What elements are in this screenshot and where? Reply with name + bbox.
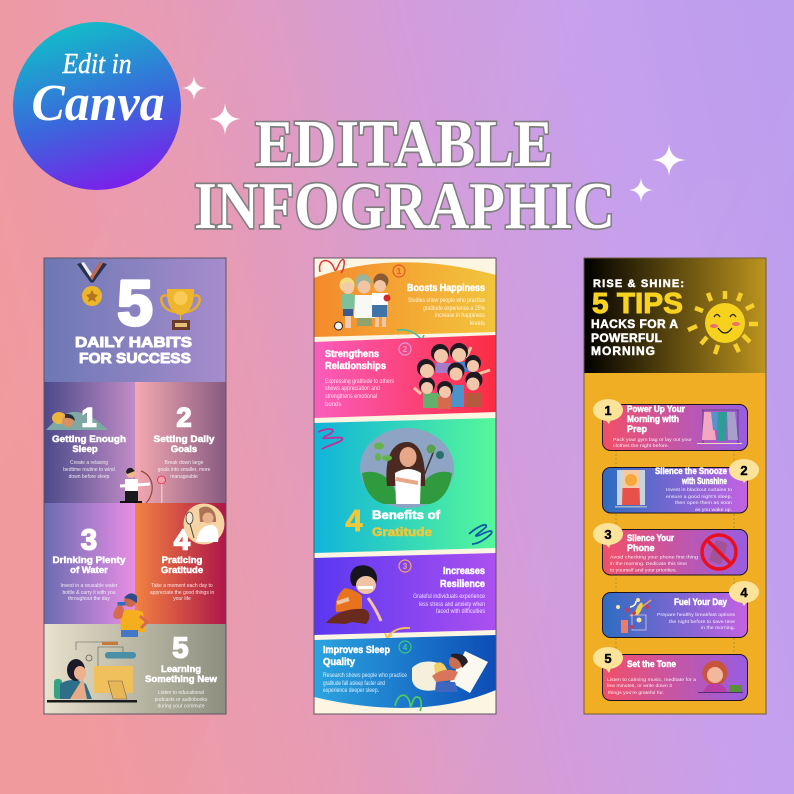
habit 3: of Water [70,565,108,576]
text: strengthens relationships: shows appreciation and [325,386,380,392]
heading: 4 benefits of gratitude: Gratitude [372,525,432,539]
number bubble 5 [593,647,623,673]
card 1: Prep [627,424,648,434]
text: increases resilience: Resilience [440,579,485,590]
badge: Edit in Canva: Edit in [62,48,132,80]
section: improves sleep quality [314,635,496,708]
text: increases resilience [413,566,486,615]
text: boosts happiness: gratitude experience a 25% [423,306,486,312]
habit 1: down before sleep [69,474,110,480]
card 1: Pack your gym bag or lay out your [613,437,692,443]
panel: benefits of gratitude [314,258,496,714]
card 2: Invest in blackout curtains to [666,487,732,493]
text: strengthens relationships: Strengthens [325,349,379,360]
icon: archer [120,468,166,503]
icon: girl with hands on cheeks [698,660,743,693]
habit 5: Listen to educational [158,690,204,696]
icon: woman hugging herself among leaves [360,428,454,508]
card 5: few minutes, or write down 3 [607,683,672,689]
heading: rise and shine 5 tips: MORNING [591,344,655,358]
card 4: Prepare healthy breakfast options [657,612,736,618]
habit 4: appreciate the good things in [150,590,214,596]
text: boosts happiness [407,283,486,327]
habit 2: Setting Daily [154,434,215,445]
icon: blue squiggle [469,525,492,544]
title [194,107,615,243]
number badge 4 [399,641,411,653]
number badge 2 [399,343,411,355]
heading: rise and shine 5 tips: 5 TIPS [592,288,683,320]
card 5 [593,647,748,700]
icon: group of children [414,343,490,409]
habit 2: Break down large [165,460,204,466]
number bubble 1 [593,399,623,424]
heading: daily habits for success: DAILY HABITS [75,334,192,351]
text: strengthens relationships: bonds [325,402,341,408]
number bubble 4: 4 [740,585,748,600]
panel: 5 tips morning [584,258,766,714]
text: strengthens relationships: strengthens emotional [325,394,377,400]
card 3: in the morning. Dedicate this time [610,561,687,567]
section: increases resilience [314,553,496,638]
habit 4: Gratitude [161,565,203,576]
heading: rise and shine 5 tips [591,278,684,358]
text: improves sleep quality: Quality [323,657,355,668]
text: strengthens relationships: Relationships [325,361,386,372]
card 1: Morning with [627,414,679,424]
number bubble 2 [729,459,759,483]
number badge 3 [399,560,411,572]
habit 3: Drinking Plenty [52,555,126,566]
card 4 [602,581,759,638]
icon: curtained window [615,470,647,508]
habit 4: 4 [174,524,190,556]
icon: trophy [161,289,200,330]
text: increases resilience: Increases [443,566,485,577]
habit 1: 1 [81,402,97,432]
icon: smiling sun [688,291,758,354]
number bubble 5: 5 [604,651,612,666]
card 3 [593,523,748,575]
card 2: Silence the Snooze [655,466,727,476]
icon: determined boy [326,565,381,624]
habit 5: podcasts or audiobooks [155,697,208,703]
habit 5: Learning [161,664,201,675]
card 3: Avoid checking your phone first thing [610,554,698,560]
card 4: the night before to save time [669,619,735,625]
habit 3: bottle & carry it with you [62,590,116,596]
heading: rise and shine 5 tips: HACKS FOR A [591,317,678,331]
icon: person sleeping on a pillow [412,651,488,693]
habit 3: Invest in a reusable water [61,583,118,589]
heading: daily habits for success [75,334,192,367]
number badge 3: 3 [403,562,408,571]
icon: red squiggle [320,260,344,273]
habit 2: Goals [171,444,197,455]
icon: breakfast foods [616,598,651,633]
text: improves sleep quality: Research shows people who practice [323,673,408,679]
text: increases resilience: Grateful individuals experience [413,594,486,600]
heading: daily habits for success: FOR SUCCESS [79,350,191,367]
icon: magenta squiggle [318,429,343,449]
text: boosts happiness: levels [470,321,485,327]
card 2: with Sunshine [681,476,727,486]
text: strengthens relationships [325,349,394,408]
habit 5: 5 [172,632,189,664]
card 2: ensure a good night's sleep, [666,494,732,500]
card 2: as you wake up. [695,507,732,513]
habit 1: bedtime routine to wind [63,467,115,473]
habit 1: Create a relaxing [70,460,108,466]
card 5: Listen to calming music, meditate for a [607,677,696,683]
text: increases resilience: faced with difficulties [436,609,485,615]
text: improves sleep quality: Improves Sleep [323,645,390,656]
arrow: teal [397,330,424,340]
sparkles [182,76,686,202]
badge: Edit in Canva [13,22,181,190]
habit 4: Praticing [162,555,203,566]
number badge 2: 2 [403,345,408,354]
card 5: Set the Tone [627,659,676,669]
card 2 [602,459,759,513]
panel: daily habits for success [44,258,226,714]
habit 1: Sleep [72,444,98,455]
card 1: clothes the night before. [613,443,669,449]
text: increases resilience: less stress and anxiety when [419,602,485,608]
habit 3: throughout the day [68,596,110,602]
big number 5: 5 [117,267,153,339]
icon: woman studying at a computer [47,642,137,702]
card 4: Fuel Your Day [674,597,727,607]
number badge 1 [393,265,405,277]
text: improves sleep quality: gratitude fall asleep faster and [323,681,385,687]
section: benefits of gratitude hero [314,418,496,553]
number bubble 3: 3 [604,527,612,542]
icon: medal [77,262,107,306]
habit 4: your life [173,596,191,602]
heading: 4 benefits of gratitude [345,503,441,539]
text: boosts happiness: Boosts Happiness [407,283,485,294]
habit 2: manageable [170,474,198,480]
badge: Edit in Canva: Canva [32,75,164,132]
habit 3: 3 [81,524,97,556]
text: boosts happiness: increase in happiness [435,313,485,319]
number bubble 1: 1 [604,403,612,418]
habit 2: 2 [176,402,192,432]
number bubble 2: 2 [740,463,748,478]
card 2: then open them as soon [675,500,732,506]
icon: three friends [334,274,390,330]
number bubble 4 [729,581,759,606]
text: strengthens relationships: Expressing gratitude to others [325,379,394,385]
habit 4 [150,524,214,602]
habit 5: during your commute [158,704,205,710]
text: improves sleep quality [323,645,408,694]
heading: 4 benefits of gratitude: Benefits of [372,508,441,522]
heading: rise and shine 5 tips: POWERFUL [591,331,662,345]
card 3: Silence Your [627,533,674,543]
number badge 4: 4 [403,643,408,652]
heading: 4 benefits of gratitude: 4 [345,503,363,538]
section: boosts happiness [314,260,496,340]
card 4: in the morning. [701,625,735,631]
habit 2: goals into smaller, more [158,467,211,473]
heading: rise and shine 5 tips: RISE & SHINE: [593,278,684,290]
icon: green squiggle [395,695,421,711]
habit 5: Something New [145,674,218,685]
text: boosts happiness: Studies show people who practice [408,298,486,304]
number badge 1: 1 [397,267,402,276]
card 1 [593,399,748,450]
icon: clothes rack [697,410,742,444]
icon: no phone [702,535,736,569]
arrow: yellow [385,628,410,638]
habit 5 [145,632,218,710]
card 5: things you're grateful for. [608,690,664,696]
icon: woman with magnifier [184,504,224,544]
card 1: Power Up Your [627,404,685,414]
card 3: to yourself and your priorities. [610,568,677,574]
icon: boy drinking water [113,593,147,637]
text: improves sleep quality: experience deeper sleep. [323,688,379,694]
title: EDITABLE [255,107,553,181]
number bubble 3 [593,523,623,548]
habit 4: Take a moment each day to [151,583,213,589]
title: INFOGRAPHIC [194,169,615,243]
section: strengthens relationships [314,335,496,418]
connector lines [616,450,734,654]
habit 2 [154,402,215,480]
habit 1: Getting Enough [52,434,126,445]
card 3: Phone [627,543,655,553]
habit 3 [52,524,126,602]
habit 1 [46,402,126,480]
